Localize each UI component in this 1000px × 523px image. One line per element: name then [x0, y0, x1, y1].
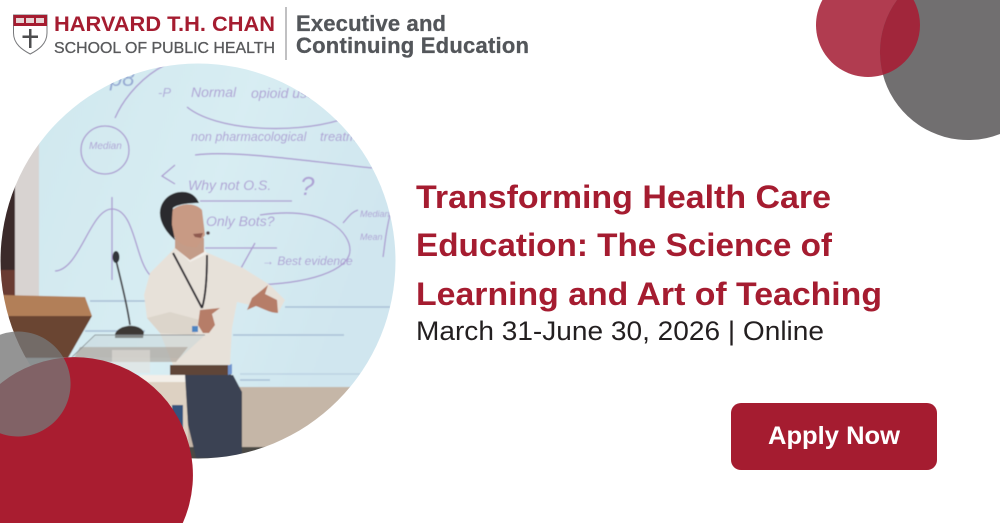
- logo: Executive and Continuing Education: Executive and: [296, 11, 446, 36]
- logo: Executive and Continuing Education: Continuing Education: [296, 33, 529, 58]
- title: Learning and Art of Teaching: [416, 276, 882, 312]
- handwriting on the screen: ?: [300, 171, 315, 201]
- logo: Executive and Continuing Education: [296, 11, 529, 58]
- handwriting on the screen: non pharmacological: [191, 130, 308, 144]
- microphone: [112, 251, 144, 338]
- slide rule lines: [85, 301, 390, 380]
- hands and watch: [247, 285, 278, 313]
- glass lectern: [72, 335, 205, 373]
- date and format: March 31-June 30, 2026 | Online: [416, 316, 824, 346]
- title: [416, 179, 882, 312]
- hair: [160, 192, 199, 240]
- decorative circles: top-right red and grey: [816, 0, 1000, 140]
- title: Transforming Health Care: [416, 179, 831, 215]
- handwriting on the screen: opioid use: [251, 85, 315, 101]
- handwriting on the screen: Median: [89, 141, 122, 152]
- handwriting on the screen: Median: [360, 209, 390, 219]
- mouth: [193, 233, 203, 238]
- lectern column: [140, 375, 188, 445]
- handwriting on the screen: p8: [109, 66, 135, 91]
- logo: Harvard T.H. Chan School of Public Health: [14, 12, 275, 57]
- photo: presenter in front of a projected screen: [0, 60, 400, 462]
- handwriting on the screen: treatment: [320, 129, 376, 144]
- handwriting on the screen: Normal: [191, 84, 237, 100]
- decorative circle: bottom-left red: [0, 357, 193, 523]
- decorative circle: bottom-left translucent grey: [0, 332, 71, 436]
- button: Apply Now: [731, 403, 937, 470]
- icon: shield: [14, 15, 47, 54]
- handwriting on the screen: → Best evidence: [262, 254, 353, 268]
- lanyard: [173, 253, 207, 308]
- neck and head: [175, 238, 204, 260]
- wall and floor: [0, 144, 350, 458]
- projected screen: [0, 60, 400, 388]
- headset mic: [206, 231, 210, 235]
- logo subtitle: School of Public Health: SCHOOL OF PUBLIC HEALTH: [54, 40, 275, 57]
- shirt: [144, 247, 285, 365]
- legs: [185, 375, 242, 458]
- logo name: Harvard T.H. Chan: HARVARD T.H. CHAN: [54, 12, 275, 36]
- handwriting on the screen: Mean: [360, 232, 383, 242]
- button: Apply Now: Apply Now: [768, 422, 901, 450]
- handwriting on the screen: Only Bots?: [206, 213, 275, 229]
- marker strokes on the screen: [55, 65, 390, 285]
- presenter: [144, 192, 285, 458]
- handwriting on the screen: [89, 66, 390, 268]
- title: Education: The Science of: [416, 227, 832, 263]
- handwriting on the screen: Why not O.S.: [188, 177, 271, 193]
- handwriting on the screen: -P: [158, 85, 171, 100]
- belt: [170, 365, 231, 375]
- wooden podium: [3, 295, 92, 358]
